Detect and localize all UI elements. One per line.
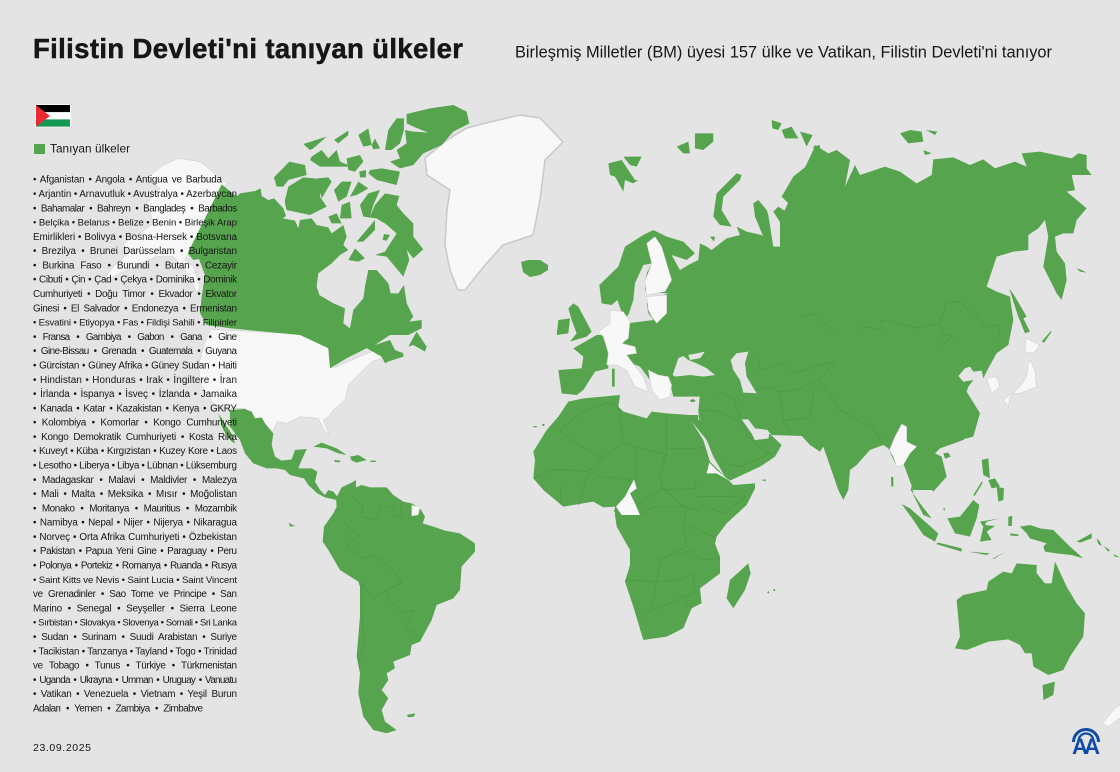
country list: • Tacikistan • Tanzanya • Tayland • Togo • Trinidad bbox=[33, 646, 237, 657]
title: Filistin Devleti'ni tanıyan ülkeler bbox=[33, 33, 463, 64]
country list: ve Grenadinler • Sao Tome ve Principe • San bbox=[33, 589, 237, 600]
country list: • Monako • Moritanya • Mauritius • Mozambik bbox=[33, 503, 237, 514]
country list: • Fransa • Gambiya • Gabon • Gana • Gine bbox=[33, 332, 237, 343]
country list bbox=[33, 175, 238, 714]
Siberia and East Asia bbox=[780, 130, 1092, 447]
country list: • Afganistan • Angola • Antigua ve Barbuda bbox=[33, 175, 222, 186]
country list: • Kanada • Katar • Kazakistan • Kenya • GKRY bbox=[33, 403, 237, 414]
contiguous United States bbox=[198, 329, 382, 435]
New Zealand bbox=[1103, 705, 1120, 727]
Persian Gulf bbox=[742, 419, 769, 440]
country list: Emirlikleri • Bolivya • Bosna-Hersek • Botsvana bbox=[33, 232, 238, 243]
country list: • Madagaskar • Malavi • Maldivler • Malezya bbox=[33, 475, 238, 486]
country list: • Polonya • Portekiz • Romanya • Ruanda • Rusya bbox=[33, 560, 237, 572]
country list: • Kongo Demokratik Cumhuriyeti • Kosta Rika bbox=[33, 432, 238, 443]
Iceland bbox=[521, 260, 548, 277]
country list: ve Tobago • Tunus • Türkiye • Türkmenistan bbox=[33, 661, 237, 672]
Canada bbox=[188, 105, 469, 368]
Africa bbox=[533, 395, 775, 640]
Myanmar bbox=[889, 424, 917, 467]
country list: • Kolombiya • Komorlar • Kongo Cumhuriyeti bbox=[33, 418, 237, 429]
country list: • Uganda • Ukrayna • Umman • Uruguay • Vanuatu bbox=[33, 675, 237, 686]
Germany, Netherlands, Denmark, Switzerland, Italy, Austria bbox=[598, 310, 648, 392]
country list: • Kuveyt • Küba • Kırgızistan • Kuzey Kore • Laos bbox=[33, 446, 237, 457]
Baltic states bbox=[647, 295, 667, 323]
Australia and Tasmania bbox=[955, 562, 1085, 700]
Japan and South Korea bbox=[987, 338, 1040, 407]
Finland bbox=[645, 237, 672, 295]
inland seas bbox=[623, 263, 769, 440]
country list: Adaları • Yemen • Zambiya • Zimbabve bbox=[33, 704, 204, 714]
country list: • Belçika • Belarus • Belize • Benin • Birleşik Arap bbox=[33, 218, 237, 229]
Southeast Asia bbox=[897, 430, 1120, 559]
Greece bbox=[648, 370, 672, 400]
date: 23.09.2025 bbox=[33, 742, 91, 754]
country list: • Gürcistan • Güney Afrika • Güney Sudan • Haiti bbox=[33, 360, 237, 372]
country list: • Hindistan • Honduras • Irak • İngiltere • İran bbox=[33, 375, 237, 386]
country list: Cumhuriyeti • Doğu Timor • Ekvador • Ekvator bbox=[33, 289, 238, 300]
Europe and western Russia bbox=[599, 120, 827, 427]
country list: • Esvatini • Etiyopya • Fas • Fildişi Sahili • Filipinler bbox=[33, 318, 238, 329]
United Kingdom, Ireland, Spain, France bbox=[557, 303, 615, 395]
icon: Palestinian flag bbox=[35, 104, 71, 127]
country list: • Saint Kitts ve Nevis • Saint Lucia • Saint Vincent bbox=[33, 575, 237, 586]
country list: • İrlanda • İspanya • İsveç • İzlanda • Jamaika bbox=[33, 389, 238, 400]
world map bbox=[103, 105, 1120, 733]
country list: • Gine-Bissau • Grenada • Guatemala • Guyana bbox=[33, 346, 238, 357]
legend: Tanıyan ülkeler bbox=[50, 142, 130, 156]
country list: • Cibuti • Çin • Çad • Çekya • Dominika • Dominik bbox=[33, 275, 237, 286]
South America bbox=[323, 480, 475, 733]
country list: • Vatikan • Venezuela • Vietnam • Yeşil Burun bbox=[33, 689, 237, 700]
country list: • Norveç • Orta Afrika Cumhuriyeti • Özbekistan bbox=[33, 532, 237, 543]
country list: • Sudan • Surinam • Suudi Arabistan • Suriye bbox=[33, 632, 238, 643]
country list: Ginesi • El Salvador • Endonezya • Ermenistan bbox=[33, 303, 237, 314]
country list: • Namibya • Nepal • Nijer • Nijerya • Nikaragua bbox=[33, 518, 238, 529]
Greenland bbox=[425, 115, 563, 290]
country list: • Pakistan • Papua Yeni Gine • Paraguay • Peru bbox=[33, 546, 237, 557]
country list: • Arjantin • Arnavutluk • Avustralya • Azerbaycan bbox=[33, 189, 237, 200]
icon: AA logo: AA bbox=[1072, 734, 1100, 759]
country list: • Brezilya • Brunei Darüsselam • Bulgaristan bbox=[33, 246, 237, 257]
country list: • Sırbistan • Slovakya • Slovenya • Somali • Sri Lanka bbox=[33, 618, 238, 629]
non-recognising European countries bbox=[598, 237, 672, 400]
Middle East and South Asia bbox=[692, 330, 940, 500]
subtitle: Birleşmiş Milletler (BM) üyesi 157 ülke ve Vatikan, Filistin Devleti'ni tanıyor bbox=[515, 44, 1053, 62]
Alaska bbox=[103, 158, 227, 293]
country list: Marino • Senegal • Seyşeller • Sierra Leone bbox=[33, 603, 238, 614]
Mexico and Central America bbox=[218, 409, 415, 717]
country list: • Burkina Faso • Burundi • Butan • Cezayir bbox=[33, 260, 238, 271]
country list: • Bahamalar • Bahreyn • Bangladeş • Barbados bbox=[33, 203, 237, 214]
Black Sea, Azov, Caspian, Baltic bbox=[623, 263, 757, 393]
country list: • Mali • Malta • Meksika • Mısır • Moğolistan bbox=[33, 489, 237, 500]
country list: • Lesotho • Liberya • Libya • Lübnan • Lüksemburg bbox=[33, 460, 237, 472]
